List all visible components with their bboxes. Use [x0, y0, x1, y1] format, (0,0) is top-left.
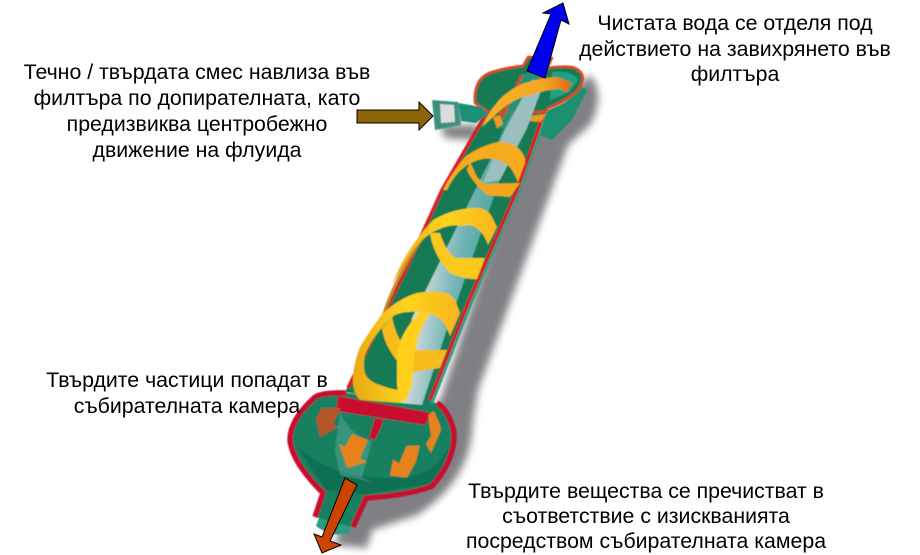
text: clean water: действието на завихрянето във — [579, 37, 891, 61]
blue outlet arrow — [527, 3, 569, 78]
ribbon 2 — [443, 142, 525, 190]
top chamber — [475, 57, 587, 183]
inlet connector — [432, 100, 488, 130]
tube walls — [348, 110, 545, 400]
text: inlet description: движение на флуида — [93, 138, 302, 162]
swirl ribbons — [353, 77, 572, 403]
text: solids enter chamber: събирателната камера — [74, 394, 300, 418]
ribbon 3 — [392, 208, 497, 285]
text: clean water: филтъра — [691, 62, 779, 86]
cyclone body — [290, 57, 587, 534]
text: solids purified: съответствие с изискванията — [502, 504, 790, 528]
red solids outlet arrow — [314, 478, 357, 553]
shadow — [335, 75, 598, 548]
thin brown ribbon tail — [385, 224, 432, 310]
text: solids enter chamber: Твърдите частици попадат в — [46, 368, 328, 392]
central core — [400, 85, 542, 405]
chamber arrows — [316, 408, 441, 480]
inner red collar — [336, 396, 432, 440]
ribbon 1 — [482, 77, 572, 127]
text: solids purified: Твърдите вещества се пречистват в — [468, 479, 824, 503]
text: inlet description: предизвиква центробежно — [67, 112, 327, 136]
text: inlet description: Течно / твърдата смес навлиза във — [24, 60, 370, 84]
text: clean water: Чистата вода се отделя под — [597, 11, 873, 35]
ribbon 4 — [353, 292, 460, 403]
bottom chamber — [290, 393, 454, 534]
ribbon back parts — [467, 162, 520, 197]
text: solids purified: посредством събирателната камера — [466, 529, 826, 553]
tube — [345, 110, 545, 404]
text: inlet description: филтъра по допирателната, като — [34, 86, 360, 110]
brown inlet arrow — [357, 102, 433, 130]
